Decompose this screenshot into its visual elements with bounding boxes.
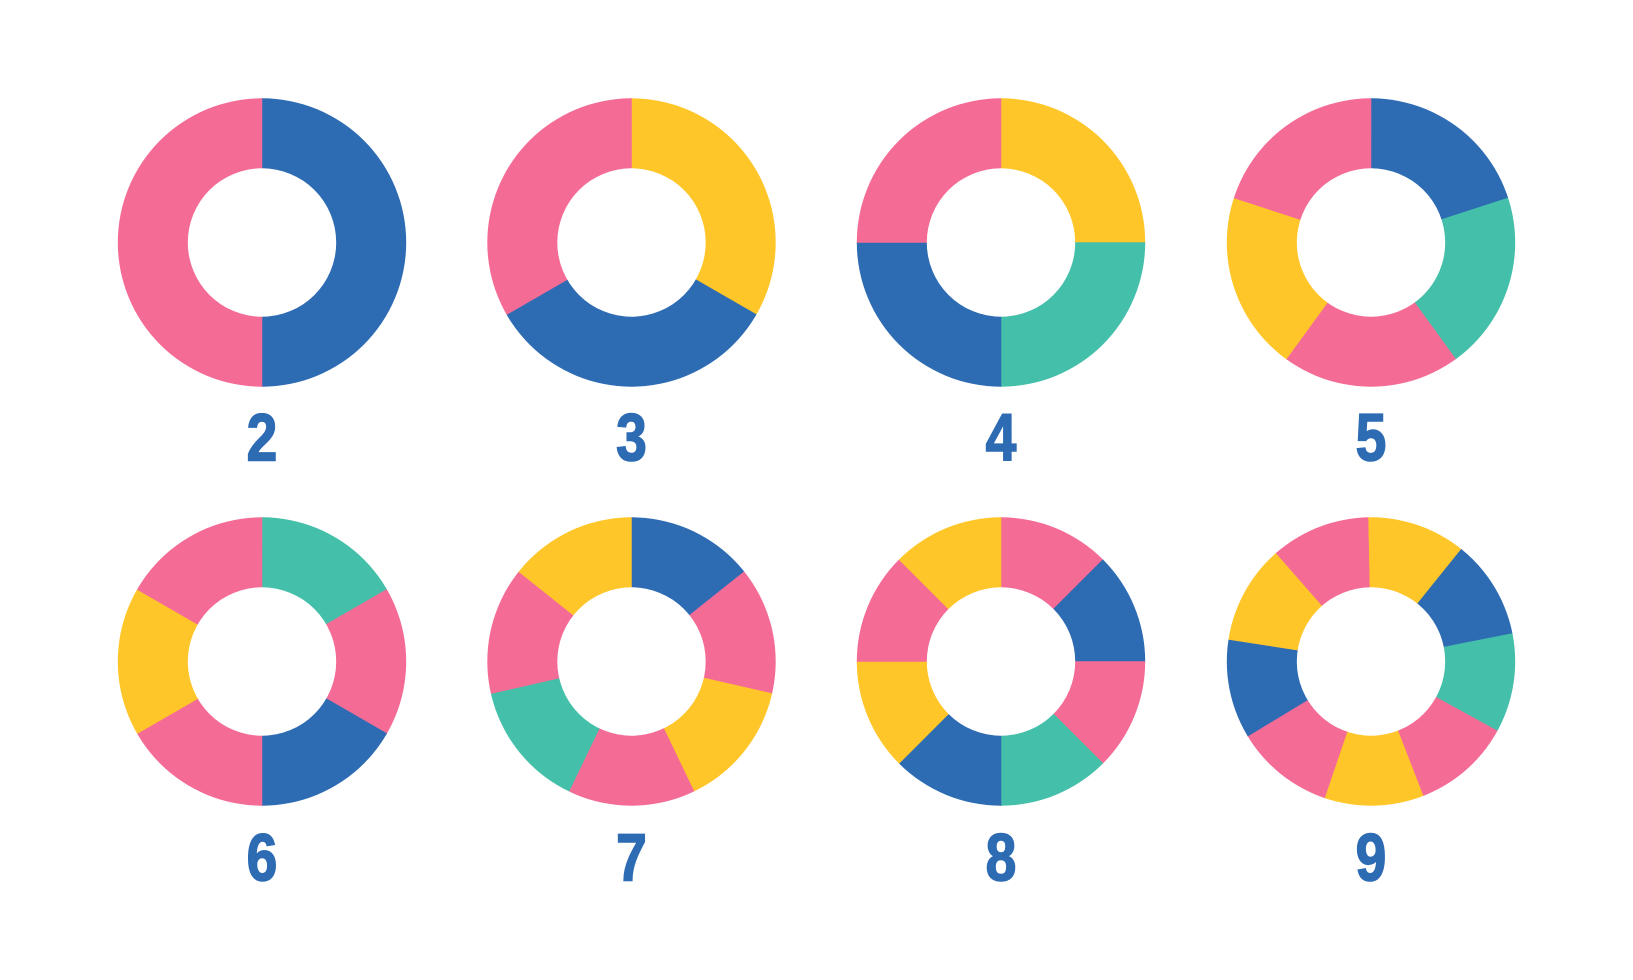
label: 7: 7: [616, 821, 647, 895]
label: 5: 5: [1356, 401, 1386, 475]
label: 4: 4: [986, 401, 1016, 475]
label: 9: 9: [1356, 821, 1386, 895]
donut chart: 6 segments: [118, 517, 406, 806]
donut chart: 9 segments: [1226, 517, 1516, 806]
donut chart: 8 segments: [856, 517, 1146, 806]
donut chart: 4 segments: [856, 98, 1146, 387]
donut chart: 2 segments: [112, 92, 412, 392]
label: 2: 2: [247, 401, 277, 475]
label: 3: 3: [616, 401, 647, 475]
donut chart: 7 segments: [487, 517, 776, 806]
label: 8: 8: [986, 821, 1016, 895]
donut chart: 5 segments: [1226, 98, 1516, 387]
donut chart: 3 segments: [487, 98, 776, 387]
label: 6: 6: [247, 821, 277, 895]
